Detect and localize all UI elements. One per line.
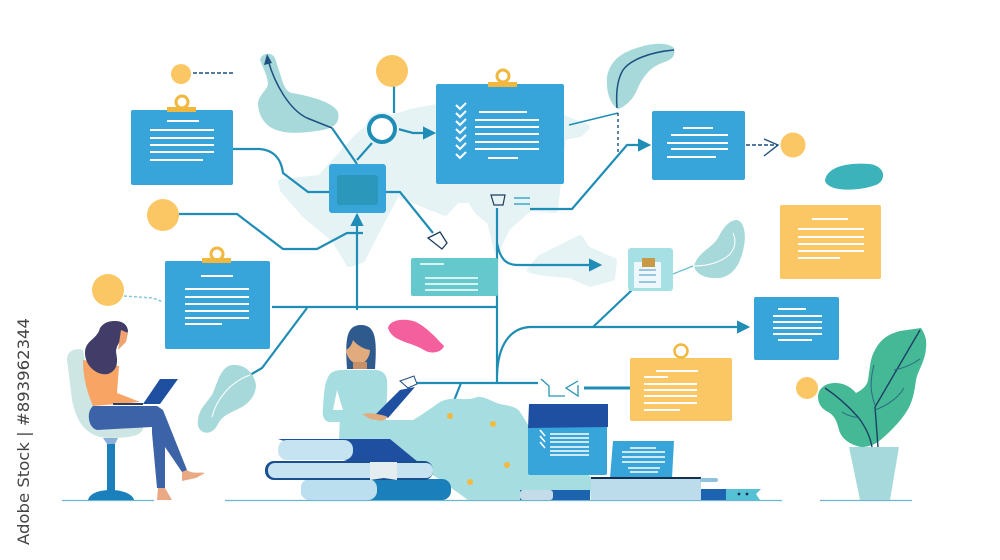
leaf: top left bbox=[258, 54, 338, 133]
blue card: right bbox=[754, 297, 839, 360]
yellow card: bottom bbox=[630, 344, 732, 421]
box with list bbox=[528, 404, 608, 475]
blue card: top right bbox=[652, 111, 745, 180]
hub square bbox=[329, 164, 386, 213]
leaf: middle right bbox=[694, 220, 745, 278]
small note icon bbox=[628, 248, 673, 291]
blob: pink bbox=[388, 320, 444, 353]
person: reading woman bbox=[323, 325, 592, 500]
yellow card: right bbox=[780, 205, 881, 279]
ring node bbox=[365, 112, 399, 146]
person: woman in chair bbox=[67, 321, 205, 500]
small marks centre bbox=[428, 195, 578, 396]
books: left stack bbox=[265, 439, 451, 500]
books: right stack bbox=[520, 477, 761, 500]
yellow dots bbox=[92, 55, 818, 399]
blob: teal top right bbox=[825, 164, 883, 190]
blue card: top center checklist bbox=[436, 70, 564, 184]
connector lines bbox=[179, 85, 748, 416]
leaf: lower left bbox=[198, 365, 256, 433]
teal card bbox=[411, 258, 498, 296]
dashed leaders bbox=[124, 73, 778, 302]
world map background bbox=[281, 107, 614, 284]
blue card: lower left bbox=[165, 248, 270, 349]
potted plant bbox=[818, 328, 926, 500]
blue card: top left bbox=[131, 96, 233, 185]
stock watermark label: Adobe Stock | #893962344 bbox=[14, 318, 33, 545]
ground lines bbox=[62, 500, 912, 502]
laptop bbox=[610, 441, 674, 478]
leaf: top right bbox=[607, 44, 674, 109]
